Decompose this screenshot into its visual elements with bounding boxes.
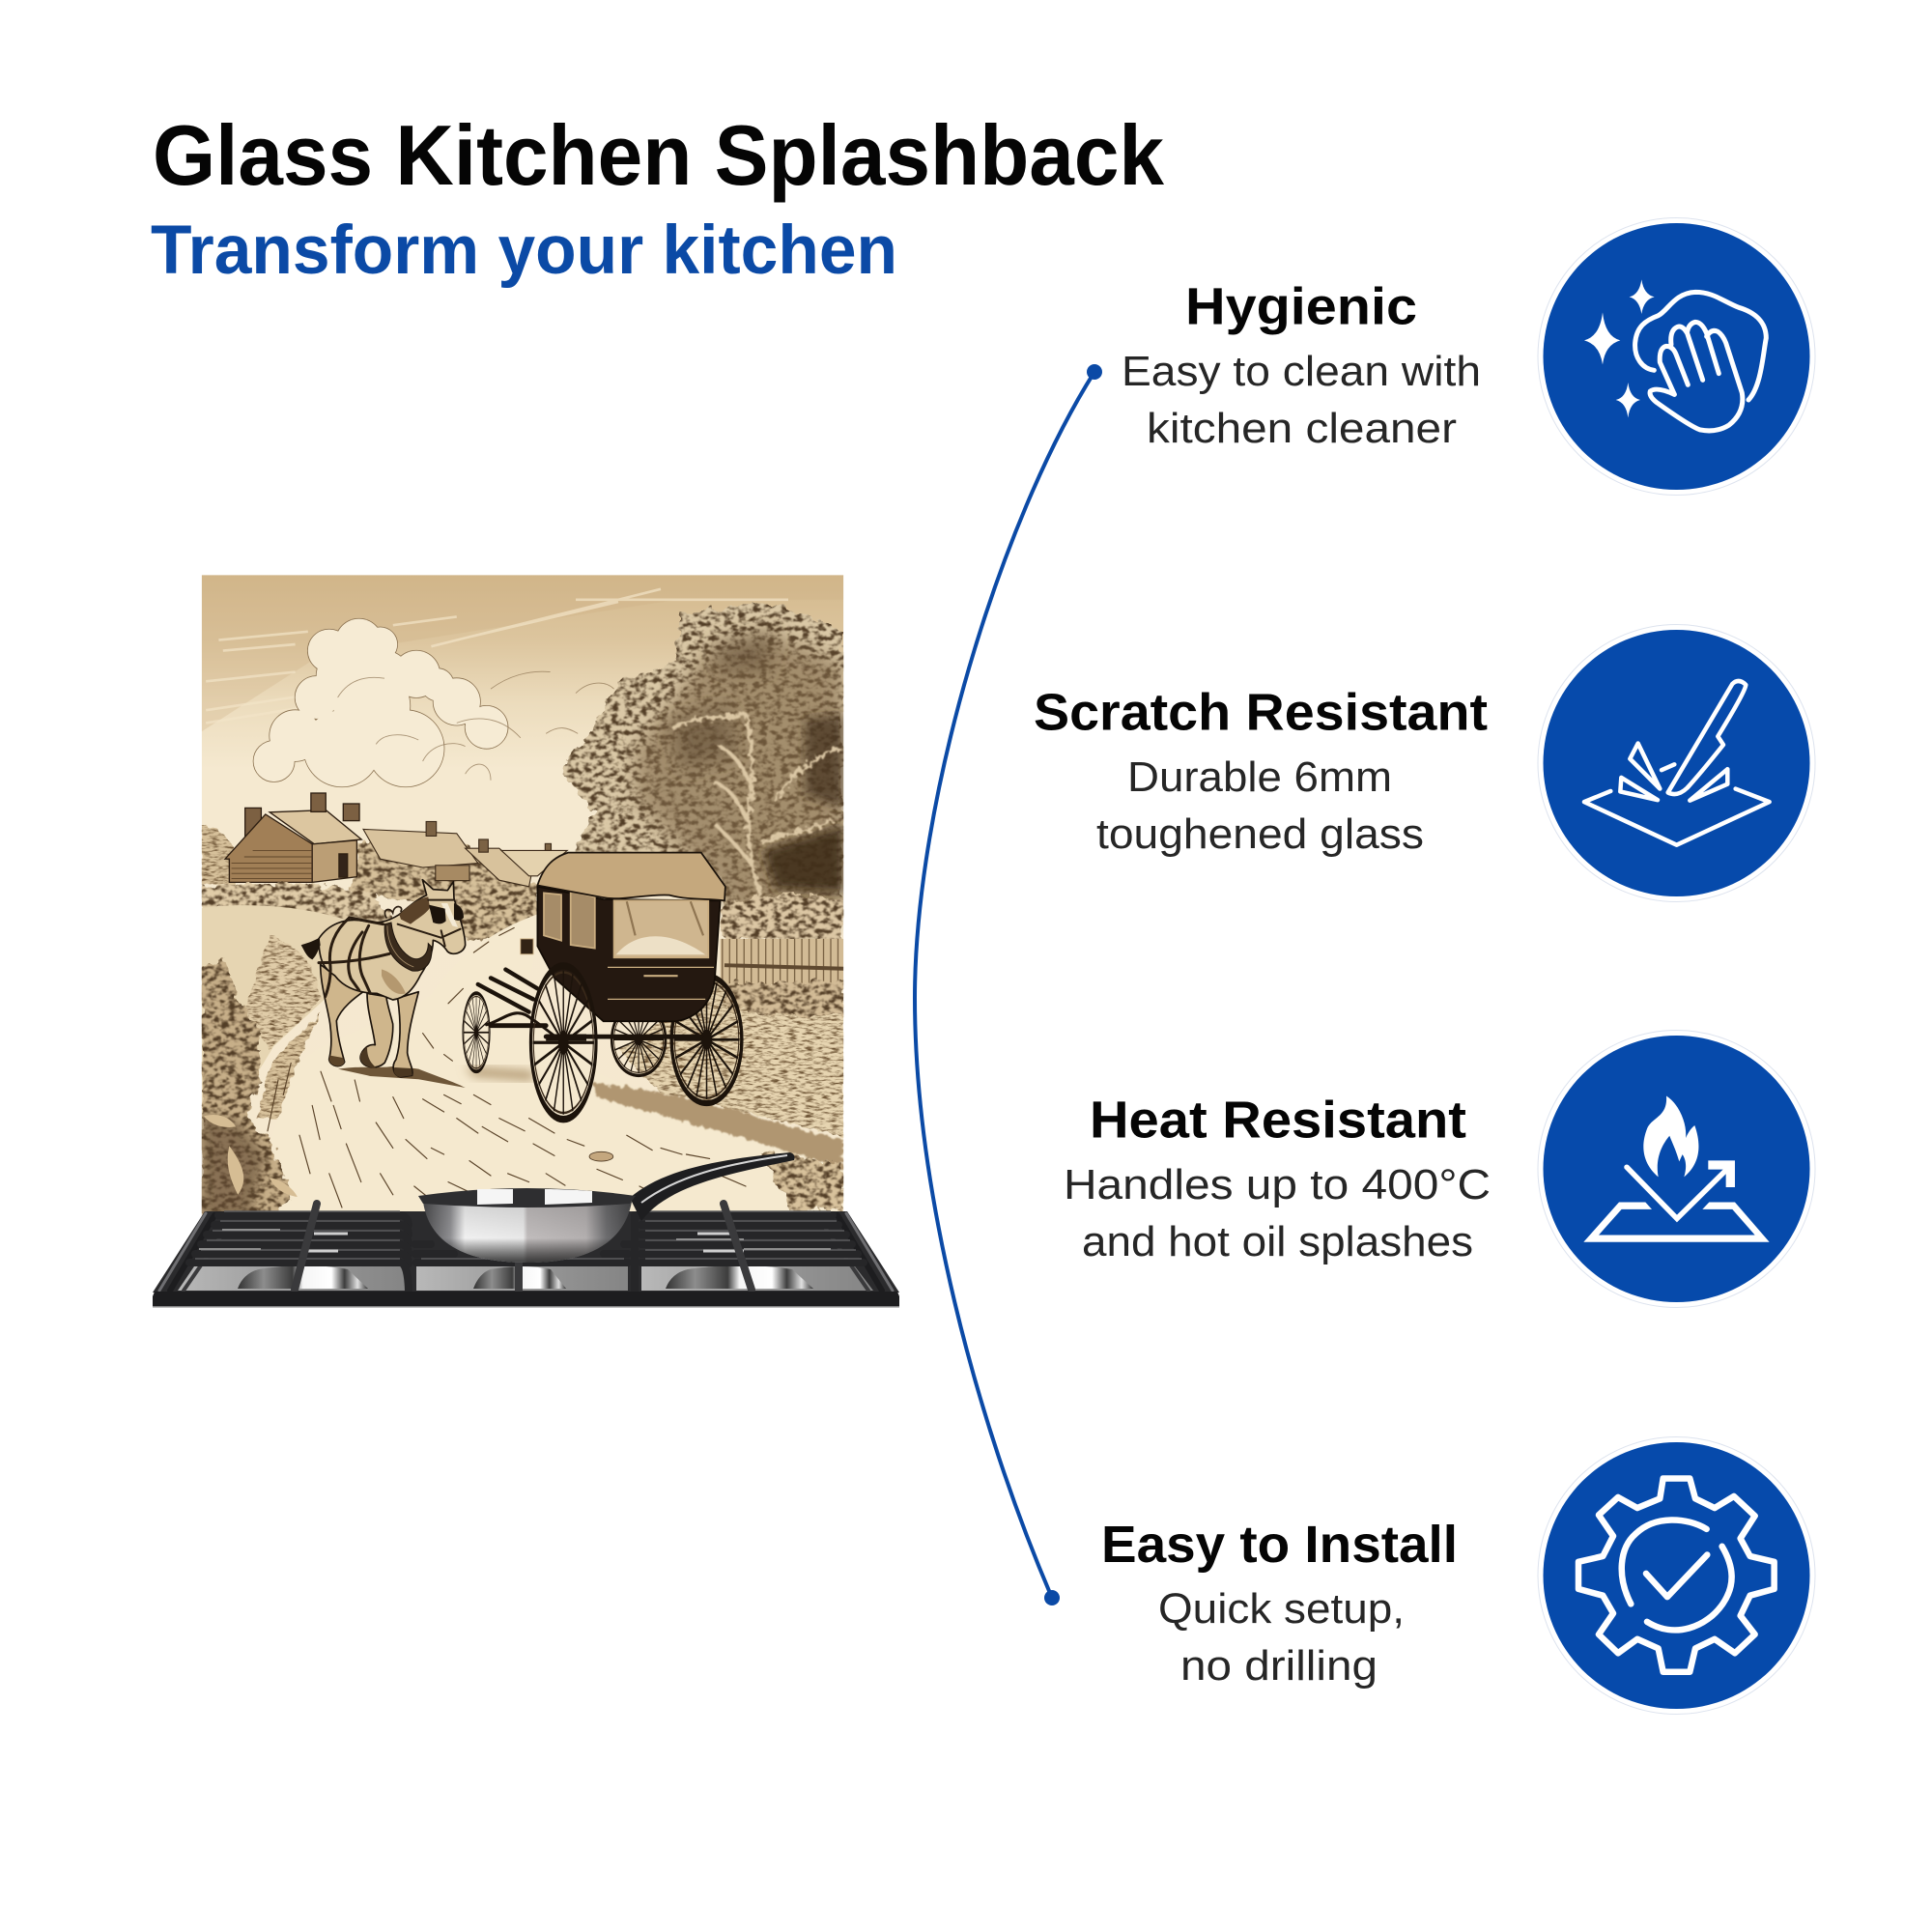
road <box>489 914 537 943</box>
main cottage <box>225 793 361 882</box>
feature text: Scratch Resistant <box>1034 684 1488 858</box>
carriage roof <box>537 853 725 900</box>
stove <box>153 1204 899 1307</box>
vertical grate bars <box>295 1204 752 1291</box>
left foliage <box>202 959 291 1220</box>
cast shadows on road <box>593 1084 843 1169</box>
frying pan <box>418 1152 794 1263</box>
feature text: Scratch Resistant: Durable 6mm <box>1127 753 1392 801</box>
feature text: Scratch Resistant: toughened glass <box>1096 810 1424 858</box>
icon: gear with checkmark <box>1538 1437 1815 1714</box>
side bars <box>159 1213 893 1291</box>
feature text: Heat Resistant: and hot oil splashes <box>1082 1218 1473 1265</box>
hob front edge <box>153 1292 899 1307</box>
feature text: Easy to Install <box>1101 1516 1458 1690</box>
feature text: Heat Resistant: Handles up to 400°C <box>1064 1161 1491 1208</box>
carriage lantern <box>521 939 533 954</box>
carriage body <box>537 887 721 1021</box>
horse harness straps <box>319 900 461 997</box>
road engraving marks <box>268 927 746 1211</box>
icon: knife scratching glass <box>1538 624 1815 902</box>
feature text: Hygienic: Hygienic <box>1185 278 1417 336</box>
feature text: Easy to Install: Quick setup, <box>1158 1585 1405 1633</box>
bushes under fence <box>721 895 843 940</box>
carriage windows and trim <box>544 891 714 999</box>
horse <box>301 880 466 1088</box>
tree trunks and branches <box>673 715 839 897</box>
far hills and hedges <box>202 825 240 885</box>
feature text: Hygienic <box>1122 278 1481 452</box>
connector curve with end dots <box>915 364 1102 1605</box>
carriage undercarriage and footboard <box>478 970 701 1037</box>
right field <box>618 978 843 1137</box>
tree masses <box>558 602 843 944</box>
horse collar <box>384 923 432 971</box>
pan handle <box>630 1152 794 1221</box>
horse face markings and blinders <box>441 903 458 927</box>
burners <box>238 1265 813 1289</box>
feature text: Heat Resistant: Heat Resistant <box>1090 1092 1466 1150</box>
feature text: Easy to Install: no drilling <box>1180 1642 1378 1690</box>
carriage front wheel <box>530 966 596 1120</box>
horse mane <box>399 896 430 924</box>
sky streaks <box>206 589 788 723</box>
carriage rear and small wheels <box>463 976 742 1103</box>
steel panels <box>178 1266 406 1291</box>
title: Glass Kitchen Splashback <box>153 107 1165 203</box>
pan body <box>423 1202 632 1263</box>
feature text: Easy to Install: Easy to Install <box>1101 1516 1458 1574</box>
hob surface <box>153 1211 899 1293</box>
icon: flame and heat reflection <box>1538 1030 1815 1308</box>
splashback artwork: sepia horse and carriage scene <box>202 575 843 1221</box>
subtitle: Transform your kitchen <box>151 213 897 289</box>
clouds <box>253 619 508 786</box>
far cottages <box>363 821 567 887</box>
mid field strip and left hill <box>202 883 397 923</box>
grate highlights <box>195 1211 862 1259</box>
feature text: Hygienic: Easy to clean with <box>1122 348 1481 395</box>
fence <box>721 939 843 984</box>
feature text: Scratch Resistant: Scratch Resistant <box>1034 684 1488 742</box>
horse tail <box>301 938 321 959</box>
feature text: Heat Resistant <box>1064 1092 1491 1265</box>
feature text: Hygienic: kitchen cleaner <box>1147 405 1457 452</box>
road left edge hatching <box>257 1012 321 1119</box>
cast-iron grates <box>189 1215 864 1291</box>
icon: hand wiping with sparkles <box>1538 218 1815 495</box>
pan rim <box>418 1188 636 1208</box>
product illustration: splashback panel over stove <box>153 575 899 1307</box>
